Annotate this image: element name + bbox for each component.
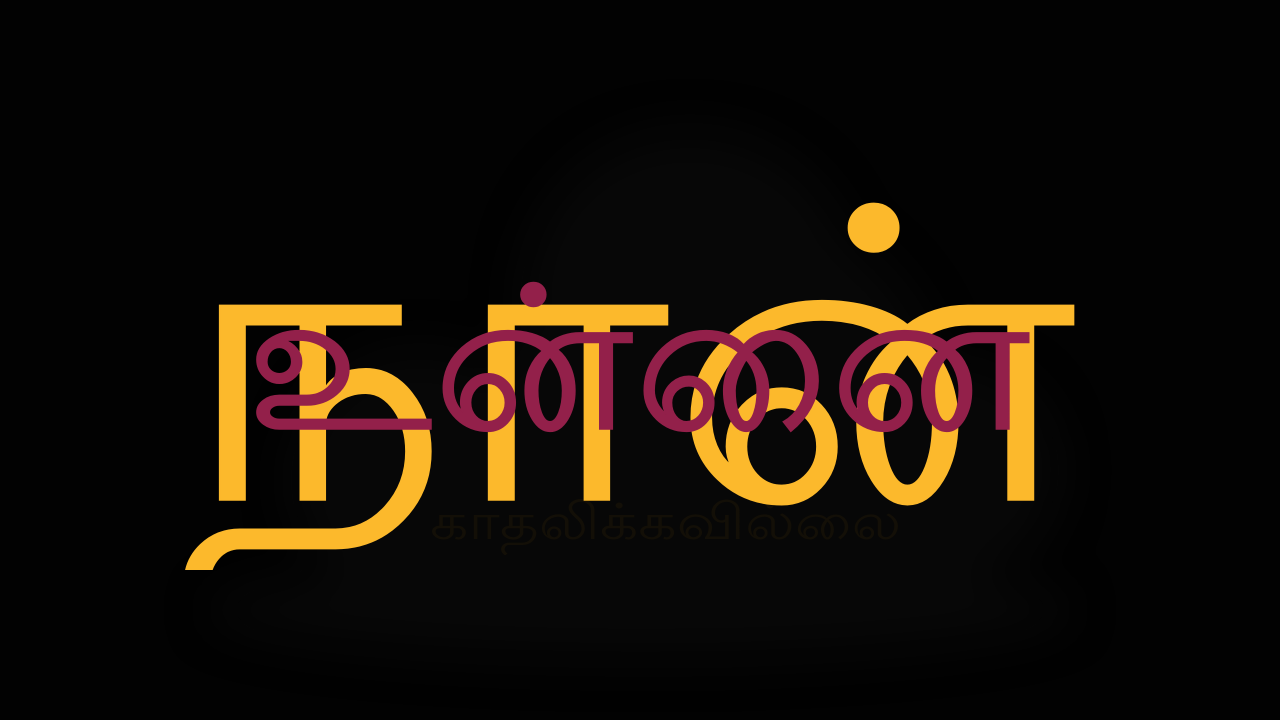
overlaid red word: உன்னை <box>245 249 1030 472</box>
faint subtitle: காதலிக்கவில்லை <box>430 494 901 550</box>
